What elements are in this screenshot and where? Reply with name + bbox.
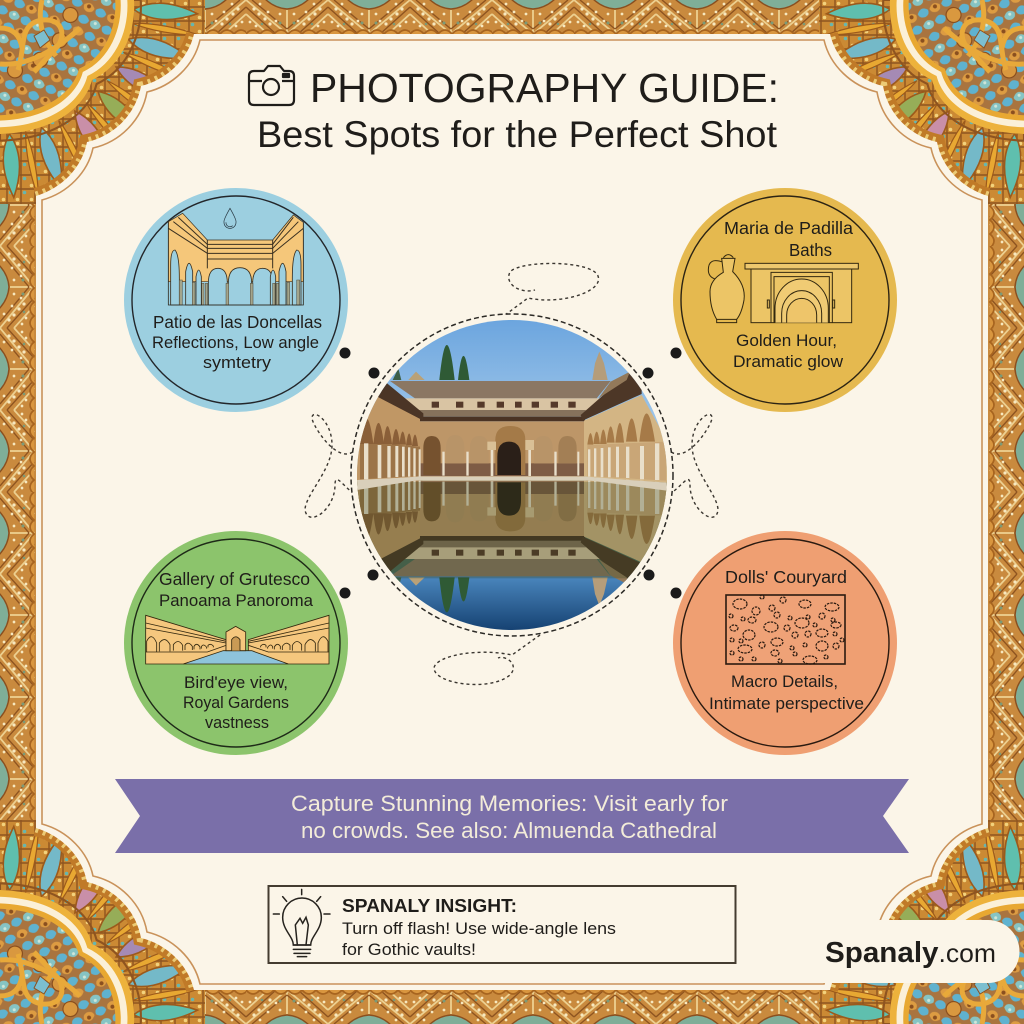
callout: Spanaly insight (268, 886, 736, 963)
callout text line 2: for Gothic vaults! (342, 940, 476, 959)
photo tips continued: Intimate perspective (709, 694, 864, 713)
callout text line 1: Turn off flash! Use wide-angle lens (342, 919, 616, 938)
dashed connector loops (305, 263, 718, 684)
photo tips: Golden Hour, (736, 331, 837, 350)
panel: Patio de las Doncellas (124, 188, 348, 412)
icon: macro plaster detail (726, 595, 845, 664)
icon: jug and arched bath (708, 255, 858, 323)
location name: Maria de Padilla (724, 218, 853, 238)
banner text line 1: Capture Stunning Memories: Visit early for (291, 791, 728, 816)
panel: Dolls' Courtyard (673, 531, 897, 755)
photo tips: Macro Details, (731, 672, 838, 691)
logo badge: Spanaly.com (820, 920, 1020, 983)
logo wordmark: Spanaly.com (825, 937, 996, 969)
panel: Maria de Padilla Baths (673, 188, 897, 412)
icon: gallery panorama (146, 615, 329, 664)
photo tips continued: Royal Gardens (183, 693, 289, 712)
photo tips continued: Dramatic glow (733, 352, 844, 371)
photo tips last line: vastness (205, 713, 269, 732)
icon: light bulb (273, 889, 330, 957)
photo tips: Reflections, Low angle (152, 334, 319, 352)
location name: Gallery of Grutesco (159, 569, 310, 589)
location name: Dolls' Couryard (725, 567, 847, 587)
photo tips: Bird'eye view, (184, 673, 288, 692)
banner text line 2: no crowds. See also: Almuenda Cathedral (301, 818, 717, 843)
location subtitle: Panoama Panoroma (159, 591, 314, 610)
banner: call to action ribbon (115, 779, 909, 853)
icon: camera (249, 66, 294, 105)
panel: Gallery of Grutesco (124, 531, 348, 755)
heading line 1: PHOTOGRAPHY GUIDE: (310, 65, 779, 111)
icon: patio arcade with water drop (168, 208, 303, 305)
central photo: courtyard with reflecting pool (351, 314, 673, 636)
location name continued: Baths (789, 240, 832, 260)
heading line 2: Best Spots for the Perfect Shot (257, 114, 778, 155)
location name: Patio de las Doncellas (153, 312, 322, 332)
title (249, 65, 779, 155)
dots (340, 348, 682, 598)
callout heading: SPANALY INSIGHT: (342, 896, 517, 916)
photo tips continued: symtetry (203, 354, 272, 372)
